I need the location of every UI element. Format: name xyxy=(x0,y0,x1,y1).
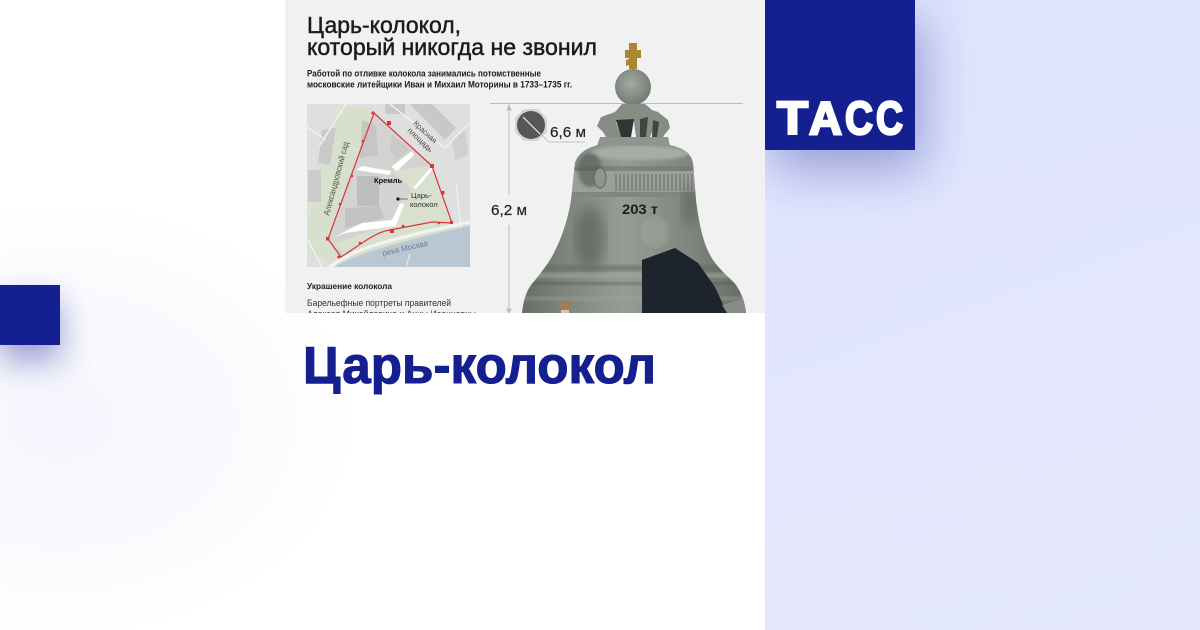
height dimension lines xyxy=(490,104,743,313)
panel background xyxy=(285,0,765,313)
building blocks xyxy=(308,104,468,228)
map labels: колокол xyxy=(410,200,438,209)
TASS logo: С xyxy=(876,92,903,144)
infographic subtitle: московские литейщики Иван и Михаил Моторины в 1733–1735 гг. xyxy=(307,80,572,90)
broken fragment xyxy=(642,248,727,313)
sphere xyxy=(615,69,651,105)
bell decoration text: Украшение колокола xyxy=(307,281,392,291)
map labels: Царь- xyxy=(411,191,432,200)
neck xyxy=(597,137,670,146)
main heading: Царь-колокол xyxy=(303,337,656,395)
map labels: площадь xyxy=(406,126,435,154)
decorative blue square xyxy=(0,285,60,345)
height label: 6,2 м xyxy=(491,202,527,219)
map labels: Александровский сад xyxy=(321,140,351,217)
infographic subtitle xyxy=(307,68,572,90)
Moskva river xyxy=(335,226,470,267)
icon: bell diameter xyxy=(515,109,585,142)
infographic title: который никогда не звонил xyxy=(307,34,597,60)
infographic preview panel xyxy=(285,0,765,313)
map labels: Кремль xyxy=(374,176,403,185)
map of the Kremlin xyxy=(307,104,470,267)
white plazas xyxy=(356,166,391,175)
crown xyxy=(597,104,670,137)
TASS logo xyxy=(765,0,915,150)
infographic title xyxy=(307,12,597,60)
weight label: 203 т xyxy=(622,201,658,217)
TASS logo: А xyxy=(809,92,842,144)
right background panel xyxy=(765,0,1200,630)
Tsar Bell map marker xyxy=(396,197,408,201)
bell decoration text xyxy=(307,281,476,319)
TASS logo: С xyxy=(845,92,873,144)
Kremlin wall xyxy=(326,111,453,259)
map labels: Красная xyxy=(412,119,439,145)
park and Kremlin green areas xyxy=(307,106,470,267)
cross xyxy=(625,43,641,69)
illustration: Tsar Bell xyxy=(520,43,750,315)
person for scale xyxy=(560,300,570,313)
map labels: река Москва xyxy=(381,239,429,258)
diameter label: 6,6 м xyxy=(550,124,586,141)
infographic title: Царь-колокол, xyxy=(307,12,461,38)
bell body xyxy=(520,140,750,315)
ornament band xyxy=(616,174,692,191)
map labels xyxy=(321,119,439,258)
lower left background glow xyxy=(0,0,765,630)
infographic subtitle: Работой по отливке колокола занимались потомственные xyxy=(307,68,541,78)
TASS logo: Т xyxy=(777,92,808,144)
bell decoration text: Барельефные портреты правителей xyxy=(307,298,451,308)
white roads xyxy=(307,104,470,267)
